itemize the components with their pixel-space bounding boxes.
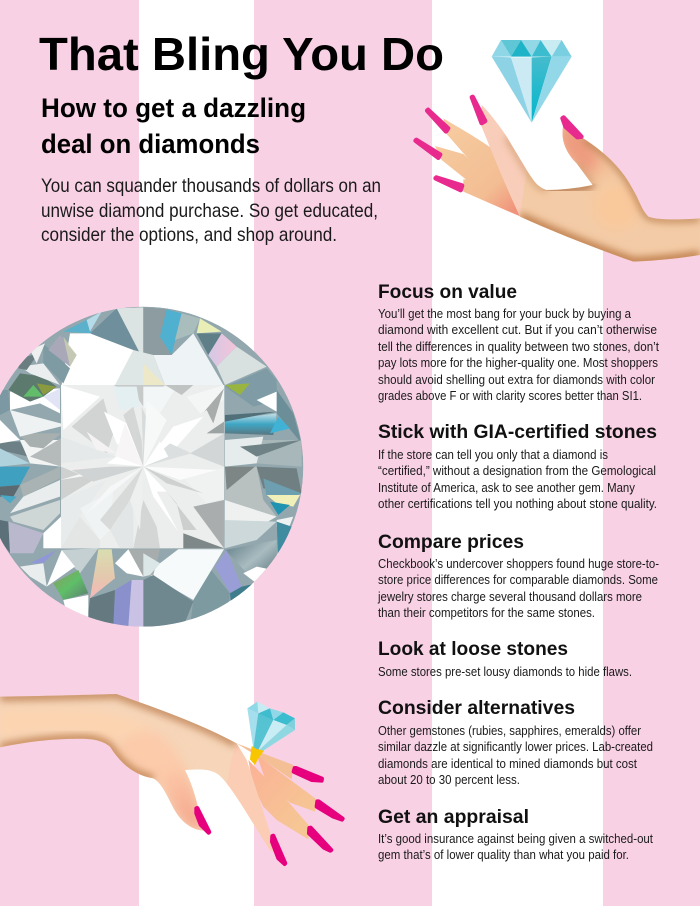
title: That Bling You Do bbox=[39, 28, 444, 80]
tip: focus on value: grades above F or with clarity scores better than SI1. bbox=[378, 388, 642, 403]
nails bbox=[196, 768, 343, 864]
tip: compare prices: Checkbook’s undercover shoppers found huge store-to- bbox=[378, 556, 659, 571]
central star bbox=[60, 400, 217, 532]
tip: compare prices bbox=[377, 531, 659, 620]
tip: compare prices: than their competitors for the same stones. bbox=[378, 605, 595, 620]
tip: focus on value: tell the differences in quality between two stones, don’t bbox=[378, 339, 659, 354]
subtitle bbox=[41, 93, 306, 159]
ring band bbox=[250, 746, 264, 765]
tip: GIA-certified stones: other certifications tell you nothing about stone quality. bbox=[378, 496, 657, 511]
icon: floating diamond bbox=[492, 40, 572, 123]
intro text: unwise diamond purchase. So get educated, bbox=[41, 200, 378, 222]
tip: consider alternatives bbox=[378, 697, 653, 787]
text column: buying tips bbox=[377, 281, 659, 862]
tip: focus on value: diamond with excellent cut. But if you can’t otherwise bbox=[378, 322, 657, 337]
tip: GIA-certified stones: Institute of America, ask to see another gem. Many bbox=[378, 480, 635, 495]
tip: focus on value: You’ll get the most bang for your buck by buying a bbox=[378, 306, 632, 321]
tip: GIA-certified stones: “certified,” without a designation from the Gemological bbox=[378, 463, 656, 478]
tip: consider alternatives: diamonds are identical to mined diamonds but cost bbox=[378, 756, 637, 771]
illustration: upper hand reaching for diamond bbox=[416, 97, 700, 262]
tip: get an appraisal: Get an appraisal bbox=[378, 806, 529, 828]
ring gem bbox=[247, 702, 295, 751]
tip: GIA-certified stones bbox=[378, 421, 657, 511]
tip: loose stones: Some stores pre-set lousy diamonds to hide flaws. bbox=[378, 664, 632, 679]
intro text: You can squander thousands of dollars on an bbox=[41, 175, 381, 197]
tip: focus on value bbox=[378, 281, 659, 403]
tip: GIA-certified stones: Stick with GIA-certified stones bbox=[378, 421, 657, 443]
nails bbox=[416, 97, 581, 190]
intro text bbox=[41, 175, 381, 246]
tip: compare prices: Compare prices bbox=[378, 531, 524, 553]
subtitle: deal on diamonds bbox=[41, 129, 260, 159]
fingers behind index bbox=[435, 118, 521, 217]
palm and thumb bbox=[482, 105, 700, 262]
tip: consider alternatives: Other gemstones (rubies, sapphires, emeralds) offer bbox=[378, 723, 642, 738]
tip: loose stones bbox=[378, 638, 632, 679]
tip: focus on value: should avoid shelling out extra for diamonds with color bbox=[378, 372, 656, 387]
tip: compare prices: jewelry stores charge several thousand dollars more bbox=[377, 589, 642, 604]
tip: get an appraisal: It’s good insurance against being given a switched-out bbox=[378, 831, 653, 846]
tip: consider alternatives: about 20 to 30 percent less. bbox=[378, 772, 520, 787]
table facet bbox=[61, 385, 224, 548]
outer facet ring bbox=[0, 307, 303, 627]
fingers behind index bbox=[237, 743, 317, 839]
tip: loose stones: Look at loose stones bbox=[378, 638, 568, 660]
tip: focus on value: pay lots more for the higher-quality one. Most shoppers bbox=[378, 355, 658, 370]
tip: consider alternatives: Consider alternatives bbox=[378, 697, 575, 719]
tip: consider alternatives: similar dazzle at significantly lower prices. Lab-created bbox=[378, 739, 653, 754]
tip: get an appraisal bbox=[378, 806, 653, 862]
tip: compare prices: store price differences for comparable diamonds. Some bbox=[378, 572, 658, 587]
illustration: lower hand wearing diamond ring bbox=[0, 694, 343, 864]
tip: get an appraisal: gem that’s of lower quality than what you paid for. bbox=[378, 847, 629, 862]
tip: focus on value: Focus on value bbox=[378, 281, 517, 303]
intro text: consider the options, and shop around. bbox=[41, 224, 337, 246]
arm, palm and thumb bbox=[0, 694, 277, 853]
subtitle: How to get a dazzling bbox=[41, 93, 306, 123]
illustration: large brilliant-cut diamond bbox=[0, 307, 303, 627]
tip: GIA-certified stones: If the store can tell you only that a diamond is bbox=[378, 447, 608, 462]
